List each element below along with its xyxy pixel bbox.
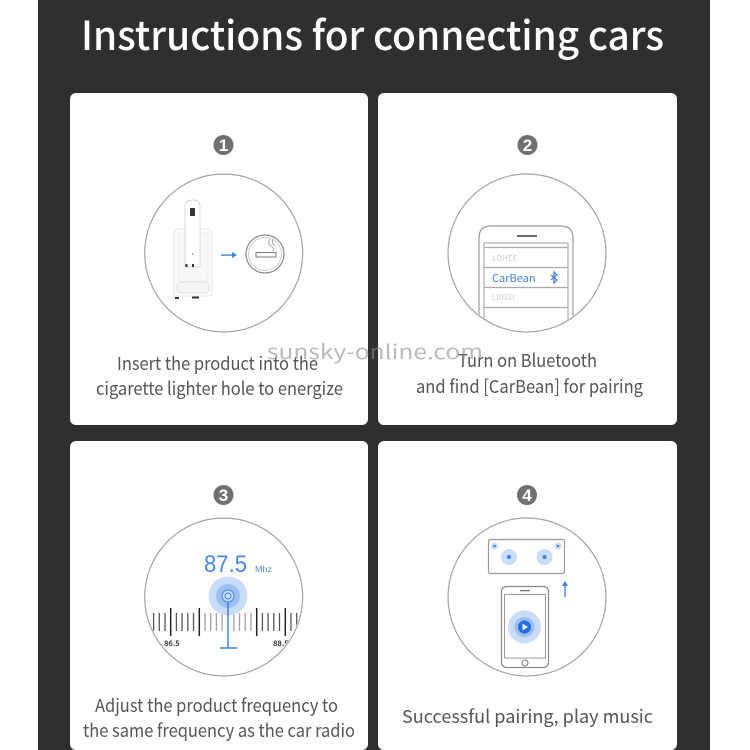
frequency readout: 87.5	[204, 551, 247, 578]
step 4 caption: Successful pairing, play music	[402, 703, 653, 729]
step 3 illustration circle	[145, 518, 303, 676]
step 4 illustration circle	[448, 518, 606, 676]
step 1 caption: cigarette lighter hole to energize	[96, 375, 343, 401]
step 4 number badge: 4	[522, 486, 532, 505]
step 2 caption: and find [CarBean] for pairing	[416, 373, 643, 399]
step 1 number badge	[214, 135, 234, 155]
icon: phone playing music	[502, 586, 548, 668]
step 2 caption	[416, 347, 643, 399]
icon: cigarette lighter socket	[246, 235, 284, 273]
tuner needle	[208, 576, 248, 648]
frequency readout	[204, 551, 272, 578]
step 1 caption: Insert the product into the	[117, 350, 318, 376]
step 3 caption: Adjust the product frequency to	[95, 692, 338, 718]
step 2 number badge: 2	[523, 136, 532, 155]
step 2 illustration circle	[448, 174, 606, 332]
step 3 caption	[83, 692, 355, 743]
step 1 illustration circle	[145, 174, 303, 332]
title: Instructions for connecting cars	[81, 4, 664, 62]
arrow: up to speakers	[562, 581, 568, 597]
watermark: sunsky-online.com	[267, 336, 483, 365]
icon: car speakers	[488, 540, 564, 574]
step 2 caption: Turn on Bluetooth	[458, 347, 597, 373]
icon: phone with bluetooth list	[478, 225, 574, 320]
frequency readout: Mhz	[255, 564, 272, 574]
radio dial scale: 86.5	[164, 638, 180, 649]
radio dial scale: 88.5	[273, 638, 289, 649]
icon: car charger device	[174, 200, 212, 299]
icon: phone with bluetooth list: LOHEE	[492, 253, 518, 264]
panel: step 2	[378, 93, 677, 425]
step 4 number badge	[517, 485, 537, 505]
step 1 caption	[96, 350, 343, 401]
step 3 number badge	[214, 485, 234, 505]
arrow: to lighter socket	[221, 252, 237, 258]
step 3 caption: the same frequency as the car radio	[83, 717, 355, 743]
radio dial scale	[154, 608, 297, 649]
icon: phone with bluetooth list: LUOXI	[492, 292, 515, 303]
panel: step 4	[378, 441, 677, 750]
icon: phone with bluetooth list: CarBean	[492, 270, 536, 286]
step 2 number badge	[518, 135, 538, 155]
step 3 number badge: 3	[219, 486, 228, 505]
panel: step 3	[70, 441, 368, 750]
panel: step 1	[70, 93, 368, 425]
step 1 number badge: 1	[219, 136, 228, 155]
